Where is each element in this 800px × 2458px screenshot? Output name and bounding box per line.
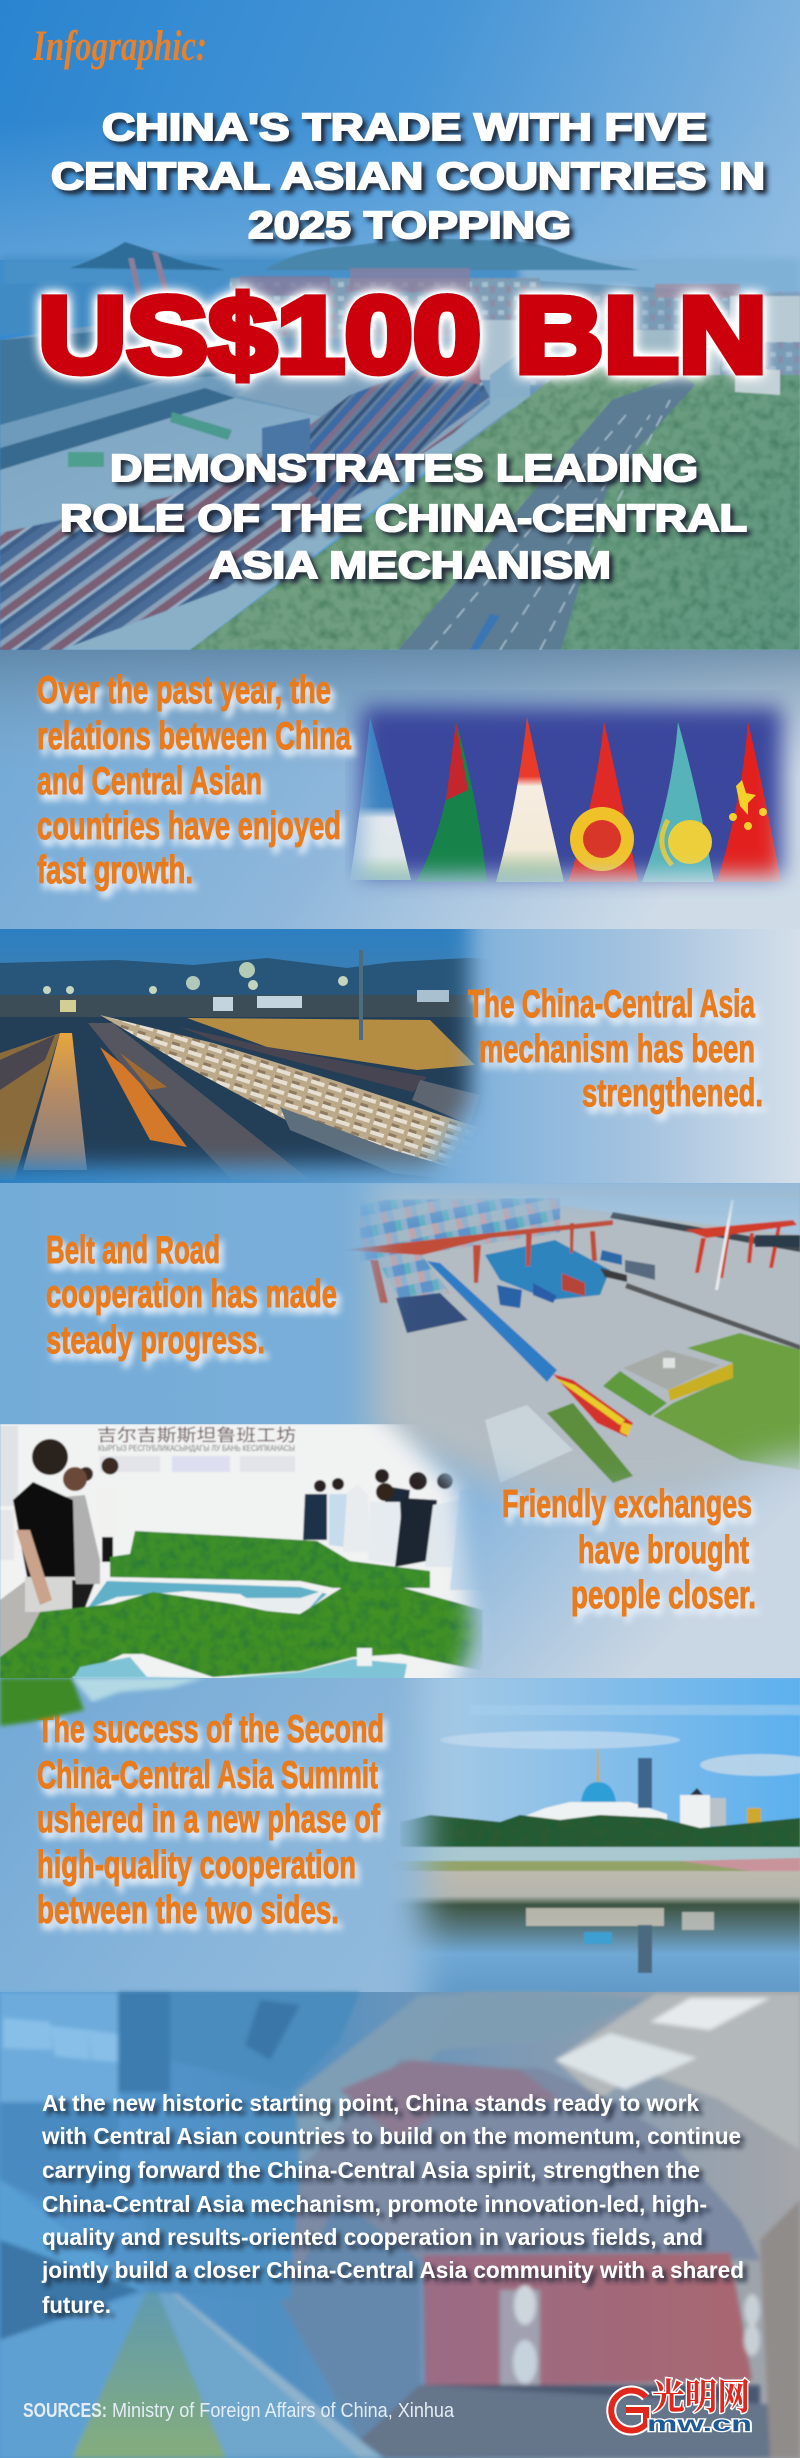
wagons	[100, 1015, 477, 1180]
text: flags caption: relations between China	[37, 715, 351, 758]
panel: friendly exchanges	[0, 1424, 756, 1726]
banner: 吉尔吉斯斯坦鲁班工坊	[97, 1426, 296, 1445]
panel: conclusion photo	[0, 1992, 800, 2458]
text: belt and road caption: steady progress.	[46, 1319, 265, 1362]
photo: Astana riverside	[380, 1678, 800, 1996]
text: belt and road caption: Belt and Road	[46, 1229, 220, 1272]
text: belt and road caption: cooperation has made	[46, 1273, 337, 1316]
text: flags caption: fast growth.	[37, 849, 193, 892]
text: summit caption: ushered in a new phase of	[37, 1798, 381, 1841]
title: lower headline: DEMONSTRATES LEADING	[110, 448, 698, 490]
conclusion text: jointly build a closer China-Central Asia community with a shared	[41, 2257, 744, 2283]
photo: rail yard at dusk	[0, 929, 520, 1187]
field	[187, 1018, 475, 1070]
conclusion text: quality and results-oriented cooperation in various fields, and	[42, 2224, 703, 2250]
concrete yard	[0, 398, 340, 533]
sources: Ministry of Foreign Affairs of China, Xinhua	[112, 2400, 455, 2422]
container rows	[0, 378, 490, 650]
station roof	[0, 1992, 118, 2102]
title: upper headline: CHINA'S TRADE WITH FIVE	[102, 107, 707, 149]
text: summit caption	[37, 1708, 384, 1932]
title: upper headline: 2025 TOPPING	[248, 205, 571, 247]
left ground	[0, 1033, 60, 1180]
text: flags caption: and Central Asian	[37, 760, 262, 803]
pad and wall	[623, 1350, 720, 1390]
green	[561, 375, 800, 650]
conclusion text: future.	[42, 2292, 111, 2318]
panel: flags	[0, 650, 800, 929]
upper-right track	[625, 1283, 800, 1350]
top haze	[362, 1183, 800, 1224]
train	[427, 1261, 557, 1382]
text: friendly caption	[502, 1483, 756, 1617]
logo: Guangming: 光明网	[652, 2376, 750, 2417]
text: summit caption: The success of the Second	[37, 1708, 384, 1751]
left dark terminal	[0, 320, 240, 425]
logo: Guangming: mw.cn	[647, 2413, 752, 2436]
grass	[653, 1333, 800, 1470]
platform	[0, 2292, 358, 2458]
conclusion text: At the new historic starting point, China stands ready to work	[42, 2090, 699, 2116]
title: upper headline	[51, 107, 765, 247]
label: Infographic: Infographic:	[32, 23, 207, 70]
text: summit caption: high-quality cooperation	[37, 1844, 356, 1887]
title: upper headline: CENTRAL ASIAN COUNTRIES IN	[51, 156, 765, 198]
sources: SOURCES:	[23, 2400, 107, 2422]
figures left	[25, 1577, 75, 1612]
conclusion text: China-Central Asia mechanism, promote innovation-led, high-	[42, 2191, 707, 2217]
text: summit caption: between the two sides.	[37, 1889, 339, 1932]
dark track + orange ground	[100, 1047, 187, 1147]
photo edge: model spilling into the next panel	[0, 1678, 84, 1726]
text: rail caption	[468, 983, 763, 1115]
sea	[0, 256, 800, 316]
hills	[70, 242, 225, 270]
highway	[398, 375, 695, 650]
terrain model	[110, 1531, 430, 1588]
photo: container terminal aerial	[330, 1183, 800, 1523]
bottom slab	[485, 1405, 573, 1483]
conclusion text: with Central Asian countries to build on the momentum, continue	[41, 2123, 741, 2149]
figures right	[303, 1494, 327, 1540]
panel: rail yard	[0, 929, 800, 1187]
big figure: US$100 BLN: US$100 BLN	[38, 274, 767, 395]
conclusion text: carrying forward the China-Central Asia spirit, strengthen the	[42, 2157, 700, 2183]
orange train	[23, 1033, 87, 1170]
train	[280, 2060, 760, 2440]
gantries	[340, 1220, 613, 1255]
text: flags caption: Over the past year, the	[37, 669, 331, 712]
port band	[0, 280, 800, 470]
panel: container terminal	[46, 1183, 800, 1503]
panel: summit	[0, 1678, 800, 1996]
text: flags caption	[37, 669, 351, 892]
title: lower headline: ROLE OF THE CHINA-CENTRAL	[60, 498, 747, 540]
photo: students around a terrain model: КЫРГЫЗ РЕСПУБЛИКАСЫНДАГЫ ЛУ БАНЬ КЕСИПКАНАСЫ	[98, 1444, 295, 1453]
title: lower headline: ASIA MECHANISM	[209, 545, 611, 587]
text: belt and road caption	[46, 1229, 337, 1362]
title: lower headline	[60, 448, 747, 587]
flags photo	[345, 690, 800, 900]
text: summit caption: China-Central Asia Summit	[37, 1754, 378, 1797]
photo: students around a terrain model	[0, 1424, 520, 1684]
right roof	[555, 1994, 800, 2150]
logo: Guangming	[611, 2376, 752, 2436]
text: flags caption: countries have enjoyed	[37, 805, 341, 848]
conclusion text	[41, 2090, 744, 2318]
panel: hero port photo	[0, 0, 800, 650]
panel: friendly exchanges background	[0, 1424, 800, 1678]
